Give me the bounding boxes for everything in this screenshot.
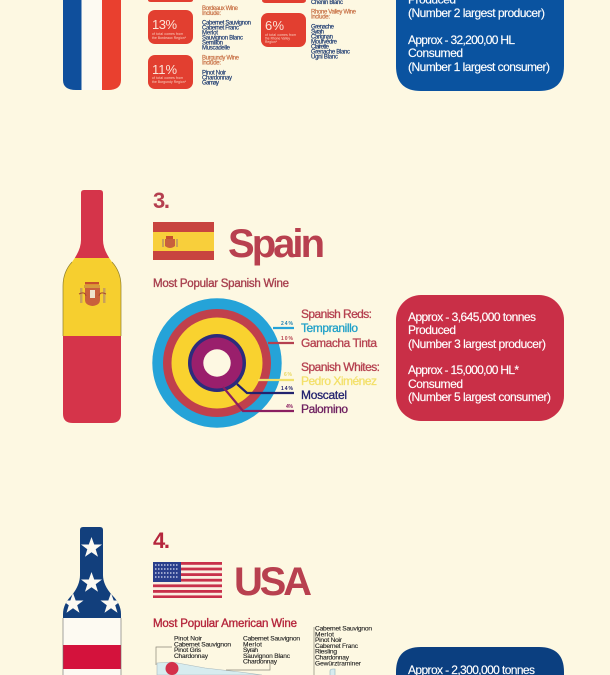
list: Burgundy wines: Include: xyxy=(202,60,221,66)
panel: spain production: (Number 3 largest producer) xyxy=(408,337,546,351)
list: Rhone Valley wines: Mourvèdre xyxy=(311,40,338,46)
list: Rhone Valley wines: Grenache xyxy=(311,24,335,30)
stat box: Bordeaux 13%: 13% xyxy=(152,17,177,32)
connector lines xyxy=(156,627,314,675)
list: pacific northwest wines: Cabernet Sauvignon xyxy=(174,641,231,648)
list: pacific northwest wines: Pinot Gris xyxy=(174,647,202,654)
list: Burgundy wines: Gamay xyxy=(202,80,219,86)
stat box: Bordeaux 13%: of total comes from xyxy=(152,32,183,36)
list: Bordeaux wines: Bordeaux Wine xyxy=(202,6,239,12)
percentages: 14% xyxy=(281,386,294,392)
list: Bordeaux wines: Include: xyxy=(202,11,221,17)
panel: france production: Approx - 32,200,00 HL xyxy=(408,33,515,47)
list: Burgundy wines: Chardonnay xyxy=(202,76,232,82)
panel: france production: Consumed xyxy=(408,46,463,60)
panel: france regional shares xyxy=(148,0,357,89)
list: Rhone Valley wines: Syrah xyxy=(311,30,324,36)
list: Rhone Valley wines: Clairette xyxy=(311,44,330,50)
percentages: 24% xyxy=(281,321,294,327)
stat box: Burgundy 11%: of total comes from xyxy=(152,76,183,80)
legend: spanish wines: Pedro Ximénez xyxy=(301,374,377,388)
percentages: 10% xyxy=(281,336,294,342)
list: new york wines: Gewürztraminer xyxy=(315,660,362,667)
list: Burgundy wines: Burgundy Wine xyxy=(202,56,240,62)
list: california wines: Merlot xyxy=(243,641,262,648)
marker: oregon region xyxy=(166,662,178,675)
list: Rhone Valley wines: Carignan xyxy=(311,34,333,40)
stat box: Burgundy 11%: 11% xyxy=(152,62,177,77)
heading: number 4: 4. xyxy=(153,528,170,553)
list: new york wines: Cabernet Sauvignon xyxy=(315,626,372,632)
bottle outline xyxy=(63,618,121,675)
bottle outline xyxy=(63,262,121,336)
list: new york wines: Chardonnay xyxy=(315,654,350,662)
stat box: top right xyxy=(262,0,306,3)
heading: Spain: Spain xyxy=(228,222,325,266)
panel: spain production: Approx - 3,645,000 tonnes xyxy=(408,310,536,324)
stat box: Burgundy 11%: the Burgundy Region* xyxy=(152,80,187,84)
icon: spanish flag xyxy=(153,222,214,260)
list: pacific northwest wines: Chardonnay xyxy=(174,653,209,660)
list: Rhone Valley wines: Grenache Blanc xyxy=(311,50,350,56)
list: Bordeaux wines: Merlot xyxy=(202,30,218,36)
usa bottle xyxy=(60,527,124,675)
list: new york wines xyxy=(315,626,372,667)
icon: coat of arms on bottle xyxy=(79,282,106,306)
list: new york wines: Merlot xyxy=(315,631,334,638)
list: Bordeaux wines xyxy=(202,6,251,52)
legend: spanish wines: Spanish Reds: xyxy=(301,307,372,321)
panel: spain production: Approx - 15,000,00 HL* xyxy=(408,363,519,377)
list: Bordeaux wines: Muscadelle xyxy=(202,46,231,52)
list: Rhone Valley wines: Ugni Blanc xyxy=(311,54,338,60)
percentages: 4% xyxy=(286,404,294,410)
heading: USA: USA xyxy=(234,560,312,604)
heading: most popular spanish wine: Most Popular Spanish Wine xyxy=(153,278,289,290)
legend: spanish wines: Moscatel xyxy=(301,388,347,402)
list: Bordeaux wines: Cabernet Sauvignon xyxy=(202,20,251,26)
list: Bordeaux wines: Semillon xyxy=(202,40,223,46)
heading: most popular american wine: Most Popular American Wine xyxy=(153,618,297,630)
chart: spanish wine rings xyxy=(152,298,294,428)
spain bottle xyxy=(60,188,124,426)
panel: france production: (Number 1 largest consumer) xyxy=(408,60,550,74)
list: california wines: Cabernet Sauvignon xyxy=(243,636,300,642)
france bottle xyxy=(63,0,121,90)
list: Rhone Valley wines: Include: xyxy=(311,14,330,20)
list: Rhone Valley wines: Rhone Valley Wine xyxy=(311,10,357,16)
list: california wines: Chardonnay xyxy=(243,659,278,666)
list: new york wines: Cabernet Franc xyxy=(315,643,359,650)
list: new york wines: Riesling xyxy=(315,649,337,656)
panel: spain production xyxy=(396,295,564,421)
stat box: Rhone Valley 6%: Region* xyxy=(265,40,278,44)
stat box: Rhone Valley 6%: 6% xyxy=(265,18,284,33)
legend: spanish wines: Gamacha Tinta xyxy=(301,336,377,350)
list: Burgundy wines xyxy=(202,56,240,86)
legend: spanish wines: Tempranillo xyxy=(301,321,358,335)
list: Burgundy wines: Pinot Noir xyxy=(202,70,226,76)
list: california wines xyxy=(243,636,300,666)
list: Bordeaux wines: Cabernet Franc xyxy=(202,26,239,32)
stat box: Bordeaux 13% xyxy=(148,10,193,44)
panel: france production xyxy=(396,0,564,91)
list: new york wines: Pinot Noir xyxy=(315,637,343,644)
map: usa wine regions xyxy=(156,627,335,675)
panel: france production: (Number 2 largest producer) xyxy=(408,6,545,20)
heading: number 3: 3. xyxy=(153,188,170,213)
percentages: 6% xyxy=(284,372,293,378)
legend: spanish wines: Spanish Whites: xyxy=(301,360,380,374)
list: california wines: Sauvignon Blanc xyxy=(243,653,291,660)
list: pacific northwest wines xyxy=(174,636,231,660)
list: pacific northwest wines: Pinot Noir xyxy=(174,636,203,642)
stat box: Burgundy 11% xyxy=(148,55,193,89)
panel: spain production: (Number 5 largest consumer) xyxy=(408,390,551,404)
panel: spain production: Consumed xyxy=(408,377,463,391)
legend: spanish wines: Palomino xyxy=(301,402,348,416)
legend: spanish wines xyxy=(301,307,380,416)
icon: american flag xyxy=(153,562,222,598)
stat box: top left xyxy=(148,0,193,2)
stat box: Bordeaux 13%: the Bordeaux Region* xyxy=(152,36,187,40)
list: california wines: Syrah xyxy=(243,647,258,654)
percentages xyxy=(281,321,294,410)
list: Bordeaux wines: Sauvignon Blanc xyxy=(202,36,243,42)
stat box: Rhone Valley 6%: of total comes from xyxy=(265,33,296,37)
stat box: Rhone Valley 6%: the Rhone Valley xyxy=(265,36,290,40)
stat box: Rhone Valley 6% xyxy=(261,13,306,47)
panel: spain production: Produced xyxy=(408,323,456,337)
leader lines xyxy=(223,328,294,411)
list: Rhone Valley wines: Chenin Blanc xyxy=(311,0,343,6)
list: Rhone Valley wines xyxy=(311,0,357,60)
panel: usa production xyxy=(396,647,564,675)
